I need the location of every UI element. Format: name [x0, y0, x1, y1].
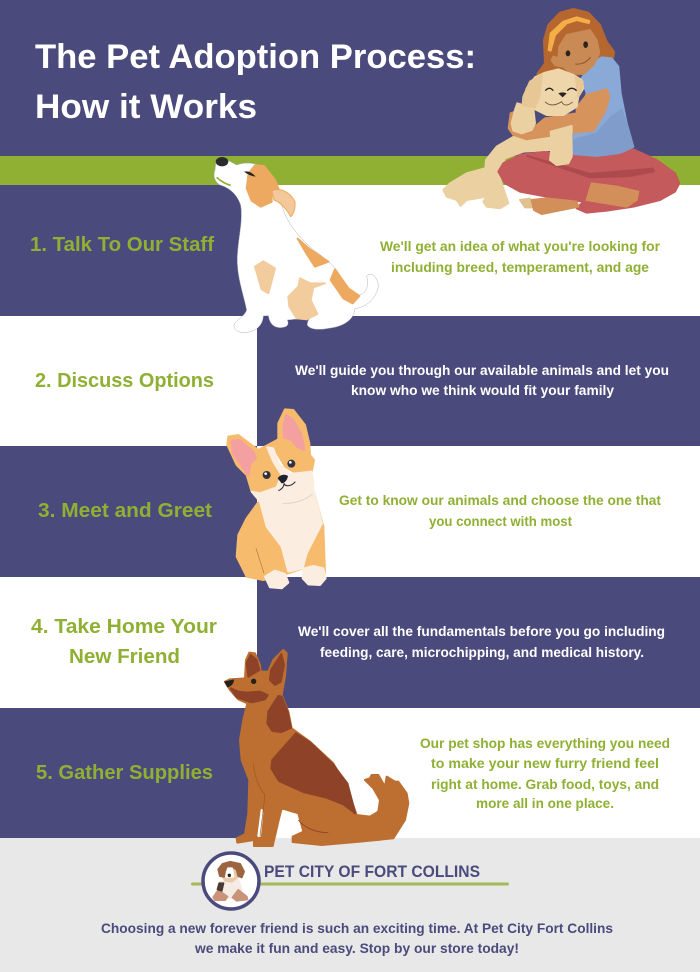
step 5 description: Our pet shop has everything you need [420, 736, 670, 751]
step 3 description: you connect with most [429, 514, 572, 529]
step 5 heading: 5. Gather Supplies [36, 762, 213, 784]
step 1 description: We'll get an idea of what you're looking for [380, 239, 661, 254]
step 1 description: including breed, temperament, and age [391, 260, 649, 275]
step 5 description: right at home. Grab food, toys, and [431, 777, 659, 792]
step 4 description: We'll cover all the fundamentals before you go including [298, 624, 665, 639]
header band [0, 0, 700, 156]
step 3 description [339, 493, 662, 529]
title: How it Works [35, 88, 257, 126]
step 4 heading [31, 616, 217, 668]
step 2 description: We'll guide you through our available animals and let you [295, 363, 669, 378]
step 4 heading: 4. Take Home Your [31, 616, 217, 638]
icon: logo puppy [213, 862, 247, 901]
footer text: Choosing a new forever friend is such an exciting time. At Pet City Fort Collins [101, 921, 613, 936]
step 4 heading: New Friend [69, 646, 180, 668]
step 5 description: more all in one place. [476, 796, 614, 811]
title [35, 38, 476, 126]
green stripe [0, 156, 700, 185]
panel: step 1 background [0, 185, 257, 316]
panel: step 2 background [257, 316, 700, 446]
footer text: we make it fun and easy. Stop by our store today! [194, 941, 519, 956]
step 4 description: feeding, care, microchipping, and medical history. [320, 645, 644, 660]
footer logo line [191, 882, 509, 886]
logo badge [203, 853, 259, 909]
brand name: PET CITY OF FORT COLLINS [264, 863, 480, 881]
icon: german shepherd [224, 650, 408, 846]
footer text [101, 921, 613, 956]
step 3 heading: 3. Meet and Greet [38, 500, 212, 522]
step 2 description [295, 363, 669, 398]
panel: step 3 background [0, 446, 257, 577]
icon: girl hugging puppy [443, 9, 679, 214]
step 1 description [380, 239, 661, 275]
icon: puppy looking up [214, 157, 378, 333]
panel: step 4 background [257, 577, 700, 708]
step 2 description: know who we think would fit your family [351, 383, 614, 398]
panel: footer background [0, 838, 700, 972]
panel: step 5 background [0, 708, 257, 838]
step 4 description [298, 624, 665, 660]
step 3 description: Get to know our animals and choose the one that [339, 493, 662, 508]
step 5 description [420, 736, 670, 811]
step 2 heading: 2. Discuss Options [35, 370, 214, 392]
icon: corgi [227, 409, 326, 588]
step 5 description: to make your new furry friend feel [431, 756, 659, 771]
title: The Pet Adoption Process: [35, 38, 476, 76]
step 1 heading: 1. Talk To Our Staff [30, 234, 214, 256]
